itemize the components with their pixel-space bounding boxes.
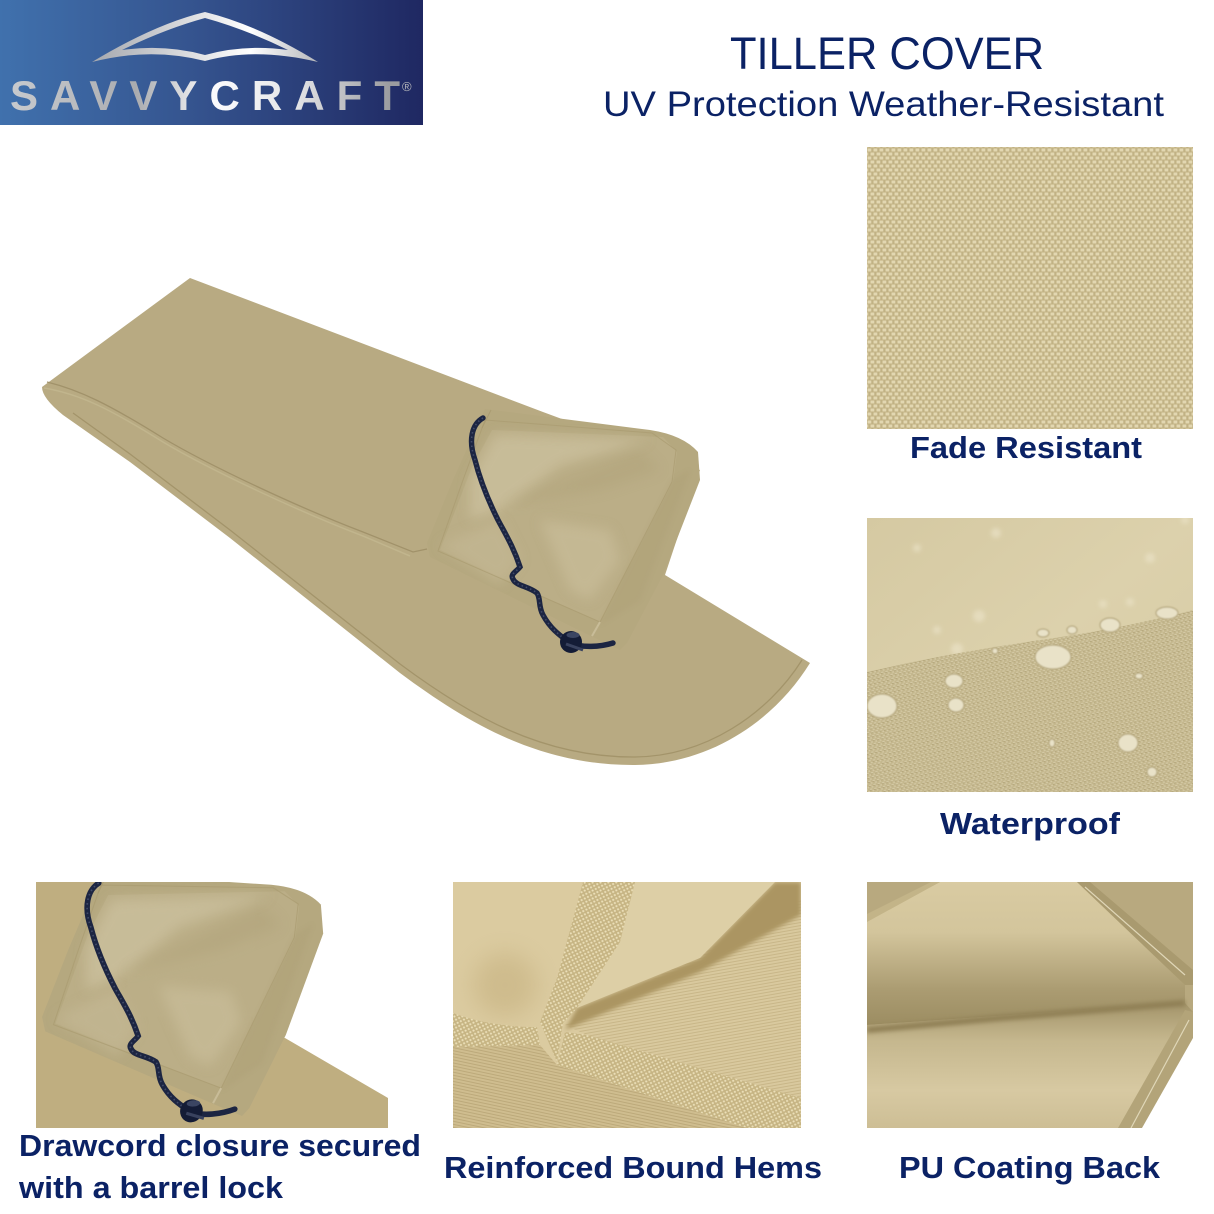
water droplets [867, 607, 1178, 777]
panel: fade resistant fabric [867, 147, 1193, 429]
top left hem [867, 882, 940, 922]
main product image: tiller cover [42, 278, 810, 765]
panel: waterproof fabric [867, 516, 1193, 792]
icon: canopy roof [92, 12, 318, 62]
folded flap with drawcord [427, 409, 700, 653]
woven fabric surface [867, 610, 1193, 792]
bottom hem stitching [73, 413, 802, 757]
panel: reinforced bound hems [453, 882, 801, 1128]
lower inner surface [867, 1003, 1193, 1128]
left hem [453, 1013, 540, 1047]
registered mark: ® [402, 79, 412, 94]
flap close-up with drawcord [42, 882, 324, 1122]
folded back [577, 882, 775, 1008]
cover background [36, 882, 388, 1128]
panel: PU coating back [867, 882, 1193, 1128]
label: reinforced bound hems: Reinforced Bound Hems [444, 1150, 822, 1185]
label: drawcord closure: with a barrel lock [18, 1170, 284, 1205]
upper inner surface [867, 882, 1185, 1025]
logo banner [0, 0, 423, 125]
label: drawcord closure: Drawcord closure secured [19, 1128, 421, 1163]
right fabric [565, 900, 801, 1098]
title: TILLER COVER [730, 28, 1044, 79]
panel: drawcord closure detail [36, 860, 388, 1132]
cover body [42, 278, 810, 765]
shadow under fold [565, 882, 801, 1030]
opening hem [47, 382, 427, 552]
subtitle: UV Protection Weather-Resistant [603, 85, 1164, 124]
label: drawcord closure [18, 1128, 421, 1205]
bottom-left fabric [453, 1045, 747, 1128]
label: waterproof: Waterproof [940, 806, 1121, 841]
cut corner [1142, 1038, 1193, 1128]
brand name: SAVVYCRAFT [10, 72, 400, 119]
label: fade resistant: Fade Resistant [910, 430, 1142, 465]
lower hem [557, 1032, 801, 1128]
bottom right hem [1118, 1010, 1193, 1128]
vertical hem [540, 882, 635, 1062]
crease [867, 1003, 1185, 1030]
top right hem [1077, 882, 1193, 985]
label: PU coating back: PU Coating Back [899, 1150, 1161, 1185]
